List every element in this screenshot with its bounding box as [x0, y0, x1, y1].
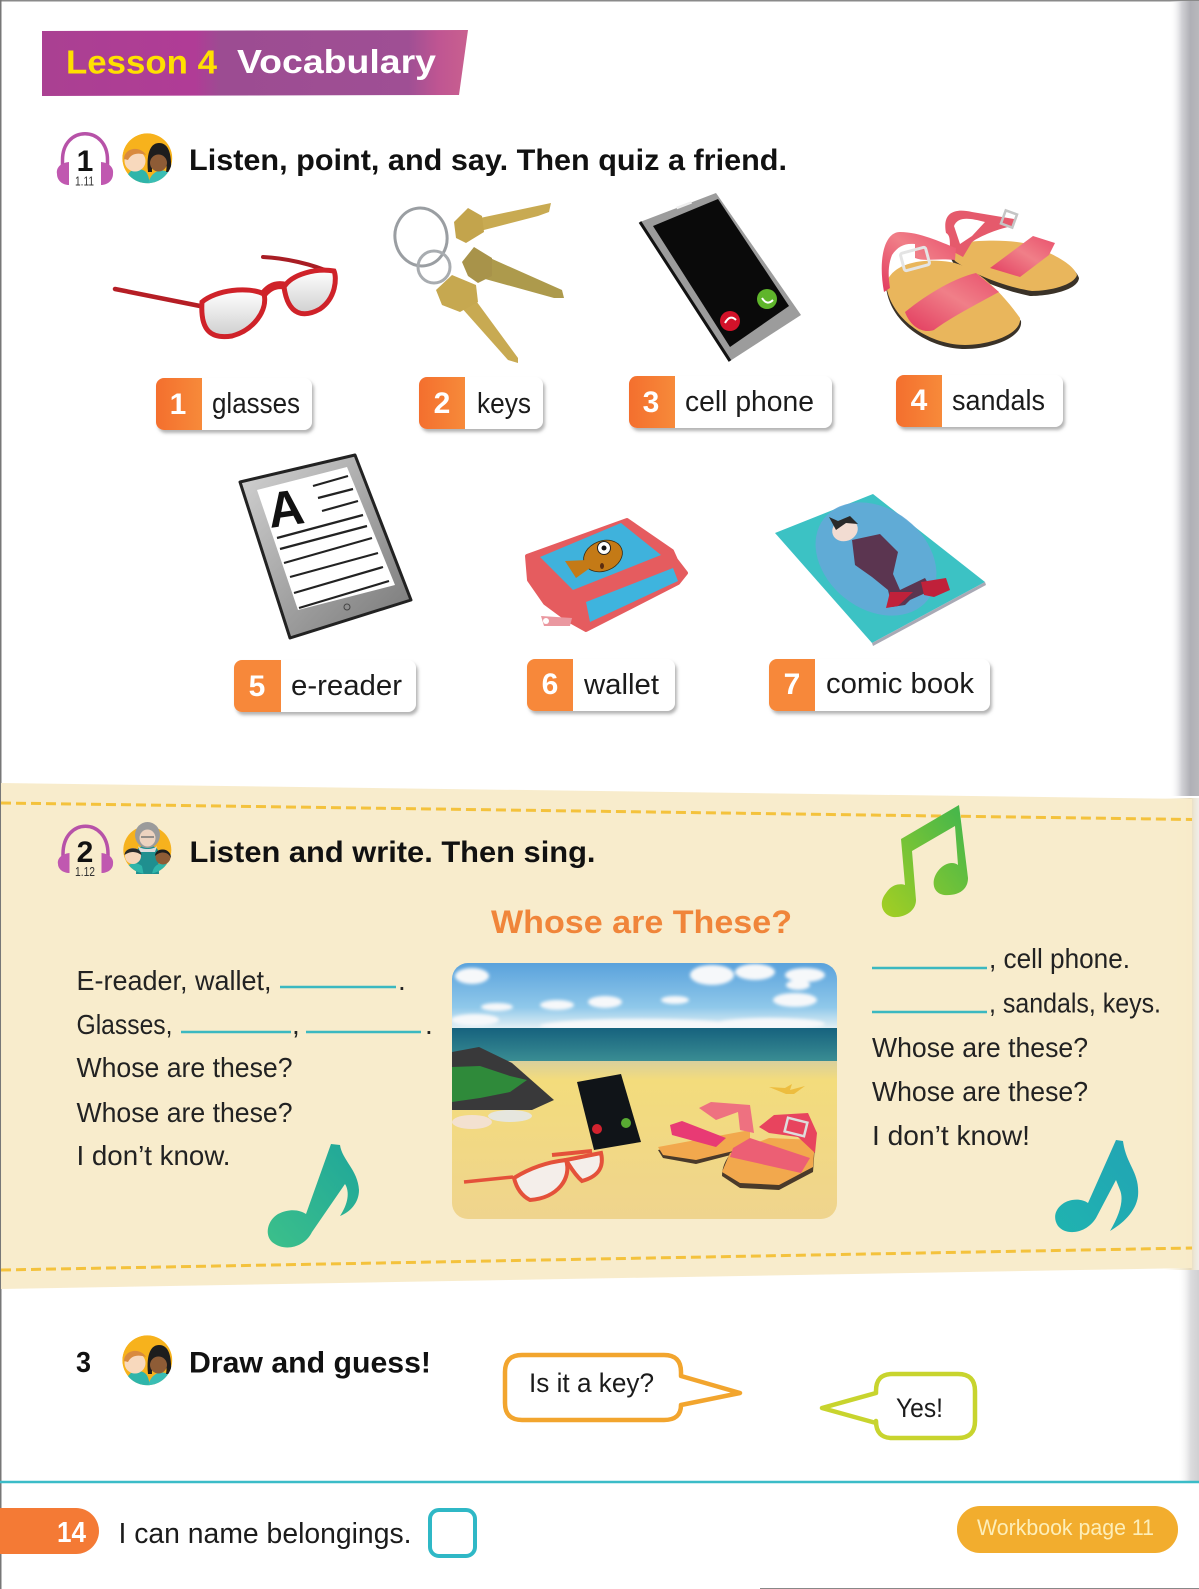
word label 4: [896, 375, 1063, 427]
activity 3 number: 3: [76, 1347, 91, 1379]
word label 3: 3: [643, 386, 659, 419]
lyrics: right verse: [872, 943, 1161, 1151]
word label 2: 2: [434, 387, 450, 420]
activity 2 audio icon: 2: [77, 836, 93, 869]
picture: comic book: [775, 479, 986, 646]
word label 6: wallet: [583, 669, 659, 701]
can-do statement: I can name belongings.: [118, 1518, 412, 1550]
picture: e-reader: A: [264, 478, 308, 539]
lesson title banner: Vocabulary: [237, 43, 437, 80]
picture: cell phone: [640, 193, 801, 361]
lesson title banner: Lesson 4: [66, 44, 218, 80]
word label 6: 6: [542, 668, 558, 701]
word label 1: [156, 378, 312, 430]
word label 7: [769, 659, 990, 711]
word label 2: [419, 377, 543, 429]
word label 2: keys: [477, 388, 531, 420]
lyrics: right verse: I don’t know!: [872, 1120, 1030, 1151]
lyrics: right verse: Whose are these?: [872, 1076, 1088, 1107]
activity 1 instruction heading: Listen, point, and say. Then quiz a friend.: [189, 144, 787, 177]
lyrics: right verse: , sandals, keys.: [989, 988, 1161, 1018]
word label 1: glasses: [212, 388, 300, 420]
word label 5: e-reader: [291, 670, 402, 702]
word label 3: [629, 376, 832, 428]
word label 7: 7: [784, 668, 800, 701]
word label 7: comic book: [826, 668, 975, 700]
lyrics: left verse: E-reader, wallet,: [76, 965, 272, 996]
activity 2 instruction heading: Listen and write. Then sing.: [190, 836, 596, 869]
activity 3 children avatar: [122, 1335, 172, 1387]
word label 5: 5: [249, 670, 265, 703]
panel: song section: [1, 783, 1192, 1289]
lyrics: left verse: ,: [292, 1009, 300, 1040]
lyrics: left verse: .: [425, 1009, 433, 1040]
workbook page reference pill: Workbook page 11: [977, 1515, 1154, 1540]
picture: red glasses: [115, 257, 335, 337]
activity 1 audio icon: 1: [77, 145, 93, 178]
lyrics: left verse: Whose are these?: [76, 1052, 292, 1083]
lyrics: right verse: Whose are these?: [872, 1032, 1088, 1063]
activity 1 audio icon: [57, 134, 113, 188]
page number tab: [0, 1508, 99, 1554]
song title: Whose are These?: [491, 904, 792, 940]
activity 1 audio icon: 1.11: [75, 174, 94, 188]
speech bubble: answer: [822, 1374, 975, 1438]
word label 5: [234, 660, 416, 712]
lyrics: left verse: [76, 965, 433, 1171]
page number tab: 14: [57, 1517, 86, 1549]
activity 2 audio icon: [58, 826, 113, 879]
lyrics: left verse: I don’t know.: [76, 1140, 230, 1171]
lesson title banner: [42, 30, 468, 96]
lyrics: left verse: .: [398, 965, 406, 996]
word label 3: cell phone: [685, 386, 814, 418]
word label 6: [527, 659, 675, 711]
lyrics: right verse: , cell phone.: [989, 943, 1130, 974]
icon: green-teal music note: [268, 1144, 359, 1247]
word label 1: 1: [170, 388, 186, 421]
page gutter shadow: [1165, 1, 1199, 1482]
picture: keys: [390, 203, 564, 363]
footer divider line: [0, 1481, 1199, 1483]
lyrics: left verse: Whose are these?: [76, 1097, 292, 1128]
lyrics: left verse: Glasses,: [76, 1009, 172, 1040]
workbook page reference pill: [957, 1506, 1178, 1553]
picture: beach scene: [451, 963, 837, 1221]
speech bubble: answer: Yes!: [896, 1393, 943, 1423]
checkbox: [430, 1510, 475, 1556]
activity 2 audio icon: 1.12: [75, 864, 95, 879]
activity 2 teacher and children avatar: [123, 822, 172, 876]
speech bubble: question: [505, 1355, 740, 1420]
activity 3 instruction heading: Draw and guess!: [189, 1346, 431, 1380]
icon: green double music note: [882, 805, 968, 917]
icon: teal music note: [1055, 1140, 1138, 1232]
picture: e-reader: [240, 455, 411, 638]
activity 1 children avatar: [122, 133, 172, 185]
speech bubble: question: Is it a key?: [529, 1368, 654, 1398]
picture: sandals: [882, 210, 1079, 349]
picture: wallet: [527, 520, 686, 630]
word label 4: sandals: [952, 385, 1045, 417]
word label 4: 4: [911, 384, 928, 417]
